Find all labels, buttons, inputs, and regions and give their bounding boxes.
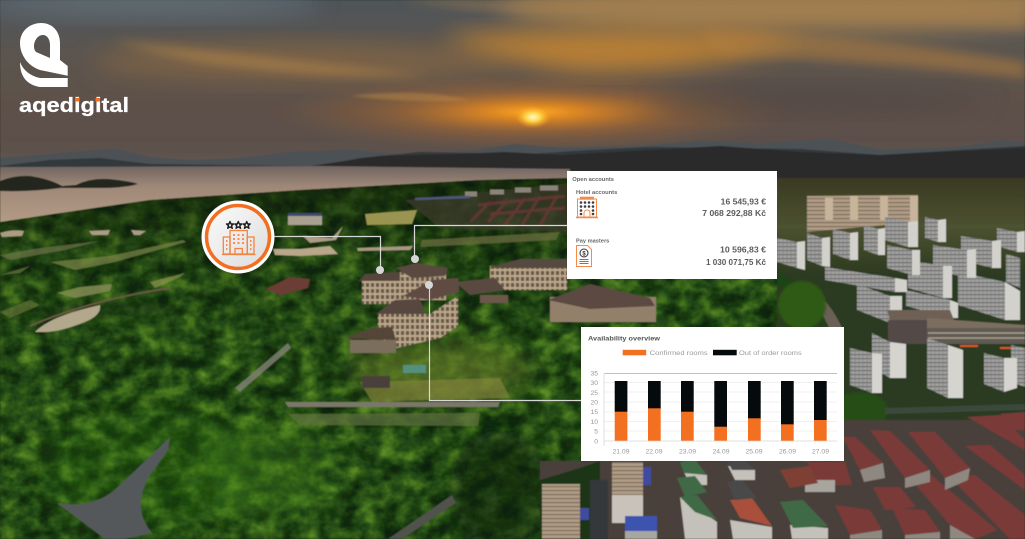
- y axis labels: 25: [590, 390, 598, 397]
- hotel accounts label: Hotel accounts: [576, 190, 617, 196]
- logo wordmark: aqedigital: [19, 95, 129, 117]
- connector lines: [274, 226, 581, 400]
- chart heading: Availability overview: [588, 336, 661, 342]
- lake: [0, 166, 570, 224]
- city apartment blocks: [777, 195, 1025, 398]
- x axis labels: 21.09: [612, 448, 630, 456]
- icon: hotel building: [222, 230, 256, 254]
- y axis labels: 0: [594, 438, 598, 445]
- bars: confirmed rooms: [615, 408, 827, 441]
- y axis labels: 30: [590, 380, 598, 387]
- city ground and trees: [777, 178, 1025, 430]
- stacked bar chart: [590, 370, 837, 456]
- logo mark: [20, 23, 68, 87]
- hotel accounts amounts: 7 068 292,88 Kč: [702, 208, 766, 218]
- y axis labels: 5: [594, 428, 598, 436]
- connector dots: [376, 255, 433, 289]
- panel: open accounts: [567, 171, 777, 279]
- chart legend: Out of order rooms: [739, 350, 802, 357]
- forest and land: [0, 178, 844, 539]
- x axis labels: 23.09: [679, 448, 696, 456]
- y axis labels: 20: [590, 400, 598, 406]
- x axis labels: [612, 448, 829, 456]
- fields and water: [0, 241, 100, 260]
- icon: pay masters document: $: [582, 252, 586, 258]
- distant red-roof town behind accounts panel: [405, 183, 570, 232]
- icon: hotel accounts building: [576, 197, 598, 218]
- icon: pay masters document: [576, 246, 592, 266]
- hotel accounts amounts: 16 545,93 €: [721, 196, 766, 206]
- hotel complex: [266, 259, 656, 388]
- y axis labels: 10: [590, 419, 598, 426]
- row houses with red and green roofs: [540, 412, 1025, 539]
- y axis labels: 15: [590, 409, 598, 416]
- pay masters amounts: 1 030 071,75 Kč: [706, 257, 766, 267]
- x axis labels: 22.09: [645, 448, 663, 456]
- x axis labels: 27.09: [812, 448, 829, 456]
- panel: availability overview: [581, 327, 844, 461]
- pay masters amounts: [706, 244, 766, 267]
- hotel accounts amounts: [702, 196, 766, 218]
- x axis labels: 26.09: [779, 448, 796, 456]
- x axis labels: 24.09: [712, 448, 730, 456]
- chart legend: [623, 350, 802, 357]
- y axis labels: 35: [590, 370, 598, 378]
- bars: out of order rooms: [615, 381, 827, 427]
- grid lines: [604, 373, 837, 446]
- sunset sky: [0, 0, 1025, 178]
- pay masters label: Pay masters: [576, 239, 609, 245]
- y axis labels: [590, 370, 598, 445]
- roads: [57, 437, 170, 539]
- panel heading: Open accounts: [572, 177, 614, 183]
- logo: aqedigital: [19, 23, 129, 117]
- icon: three stars: [226, 222, 250, 228]
- pay masters amounts: 10 596,83 €: [720, 244, 766, 254]
- chart legend: Confirmed rooms: [650, 350, 708, 357]
- distant mountains: [0, 139, 1025, 190]
- hotel icon badge: [202, 200, 274, 274]
- x axis labels: 25.09: [745, 448, 763, 456]
